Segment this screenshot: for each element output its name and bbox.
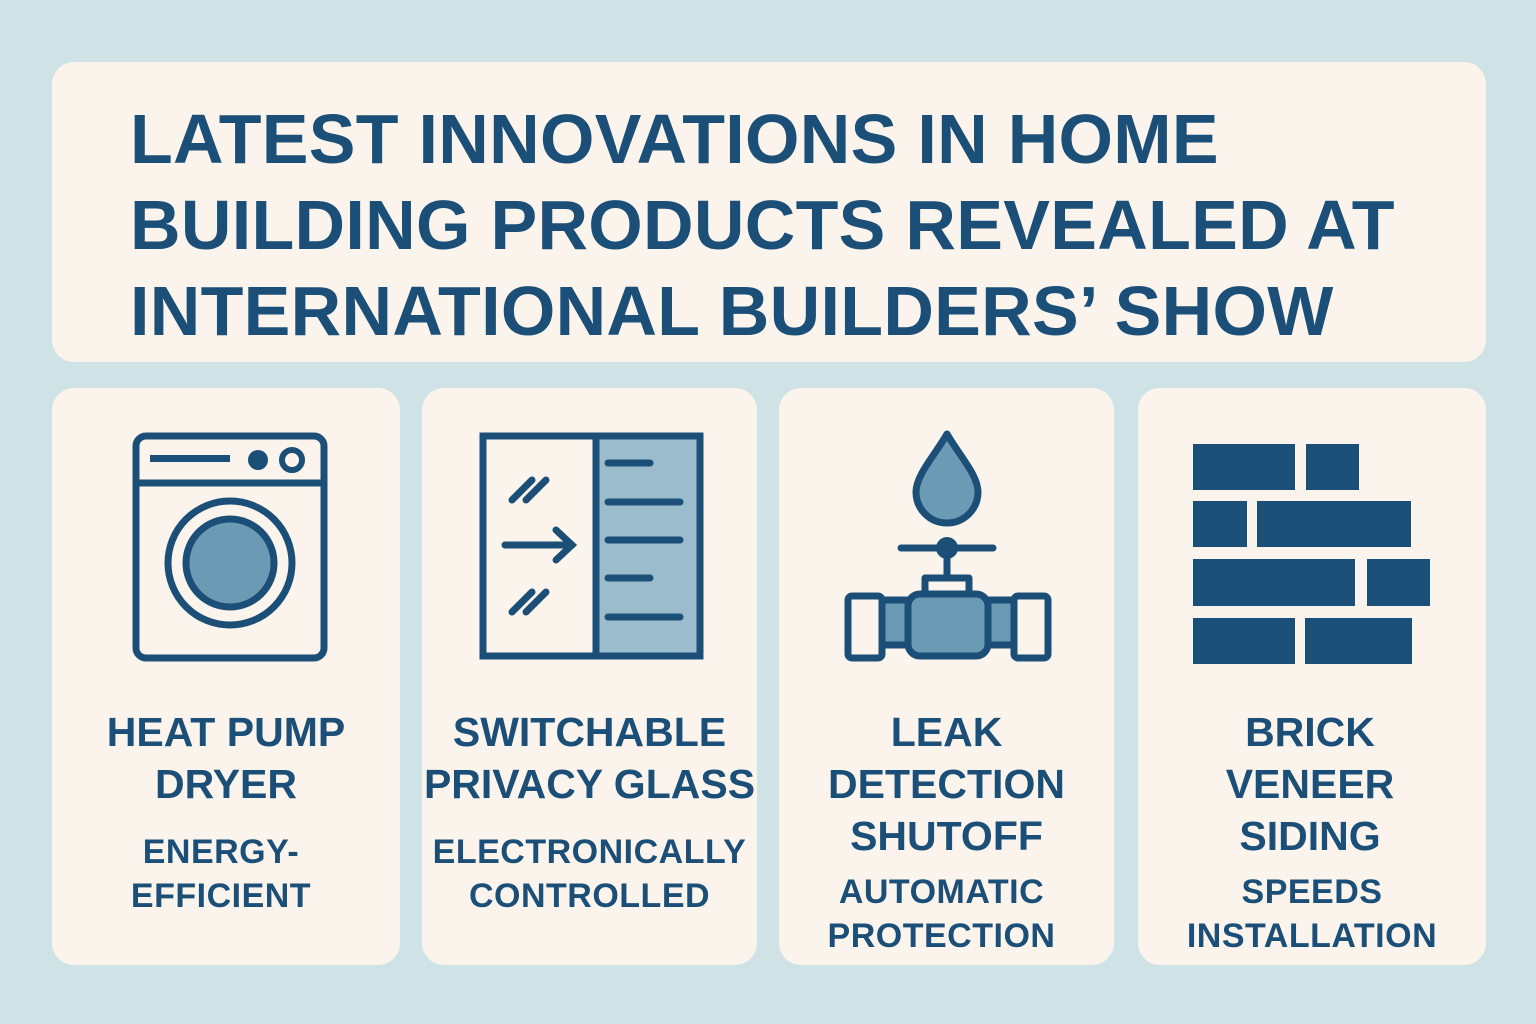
subtext: EFFICIENT [131, 877, 311, 915]
subtext: AUTOMATIC [839, 873, 1044, 911]
subtext [1187, 873, 1437, 955]
icon: dryer [132, 432, 328, 662]
subtext [131, 833, 311, 915]
heading: DETECTION [828, 761, 1065, 807]
heading: SWITCHABLE [453, 709, 726, 755]
heading: PRIVACY GLASS [424, 761, 755, 807]
heading [1226, 709, 1394, 859]
subtext: INSTALLATION [1187, 917, 1437, 955]
title: LATEST INNOVATIONS IN HOME [130, 100, 1219, 178]
icon: valve and drop [844, 430, 1052, 662]
heading: DRYER [155, 761, 297, 807]
panel: privacy glass [422, 388, 757, 965]
subtext [433, 833, 746, 915]
heading [828, 709, 1065, 859]
heading [424, 709, 755, 807]
title: INTERNATIONAL BUILDERS’ SHOW [130, 272, 1334, 350]
heading: SHUTOFF [850, 813, 1043, 859]
title [130, 100, 1395, 350]
panel: brick veneer [1138, 388, 1486, 965]
heading: BRICK [1245, 709, 1375, 755]
heading: SIDING [1239, 813, 1381, 859]
panel: heat pump dryer [52, 388, 400, 965]
icon: glass [480, 432, 704, 660]
heading: LEAK [891, 709, 1002, 755]
subtext: SPEEDS [1242, 873, 1382, 911]
heading [107, 709, 345, 807]
subtext: PROTECTION [828, 917, 1055, 955]
heading: HEAT PUMP [107, 709, 345, 755]
subtext [828, 873, 1055, 955]
icon: bricks [1193, 444, 1430, 664]
subtext: ELECTRONICALLY [433, 833, 746, 871]
subtext: CONTROLLED [469, 877, 710, 915]
heading: VENEER [1226, 761, 1394, 807]
title panel [52, 62, 1486, 362]
subtext: ENERGY- [143, 833, 299, 871]
title: BUILDING PRODUCTS REVEALED AT [130, 186, 1395, 264]
panel: leak detection [779, 388, 1114, 965]
